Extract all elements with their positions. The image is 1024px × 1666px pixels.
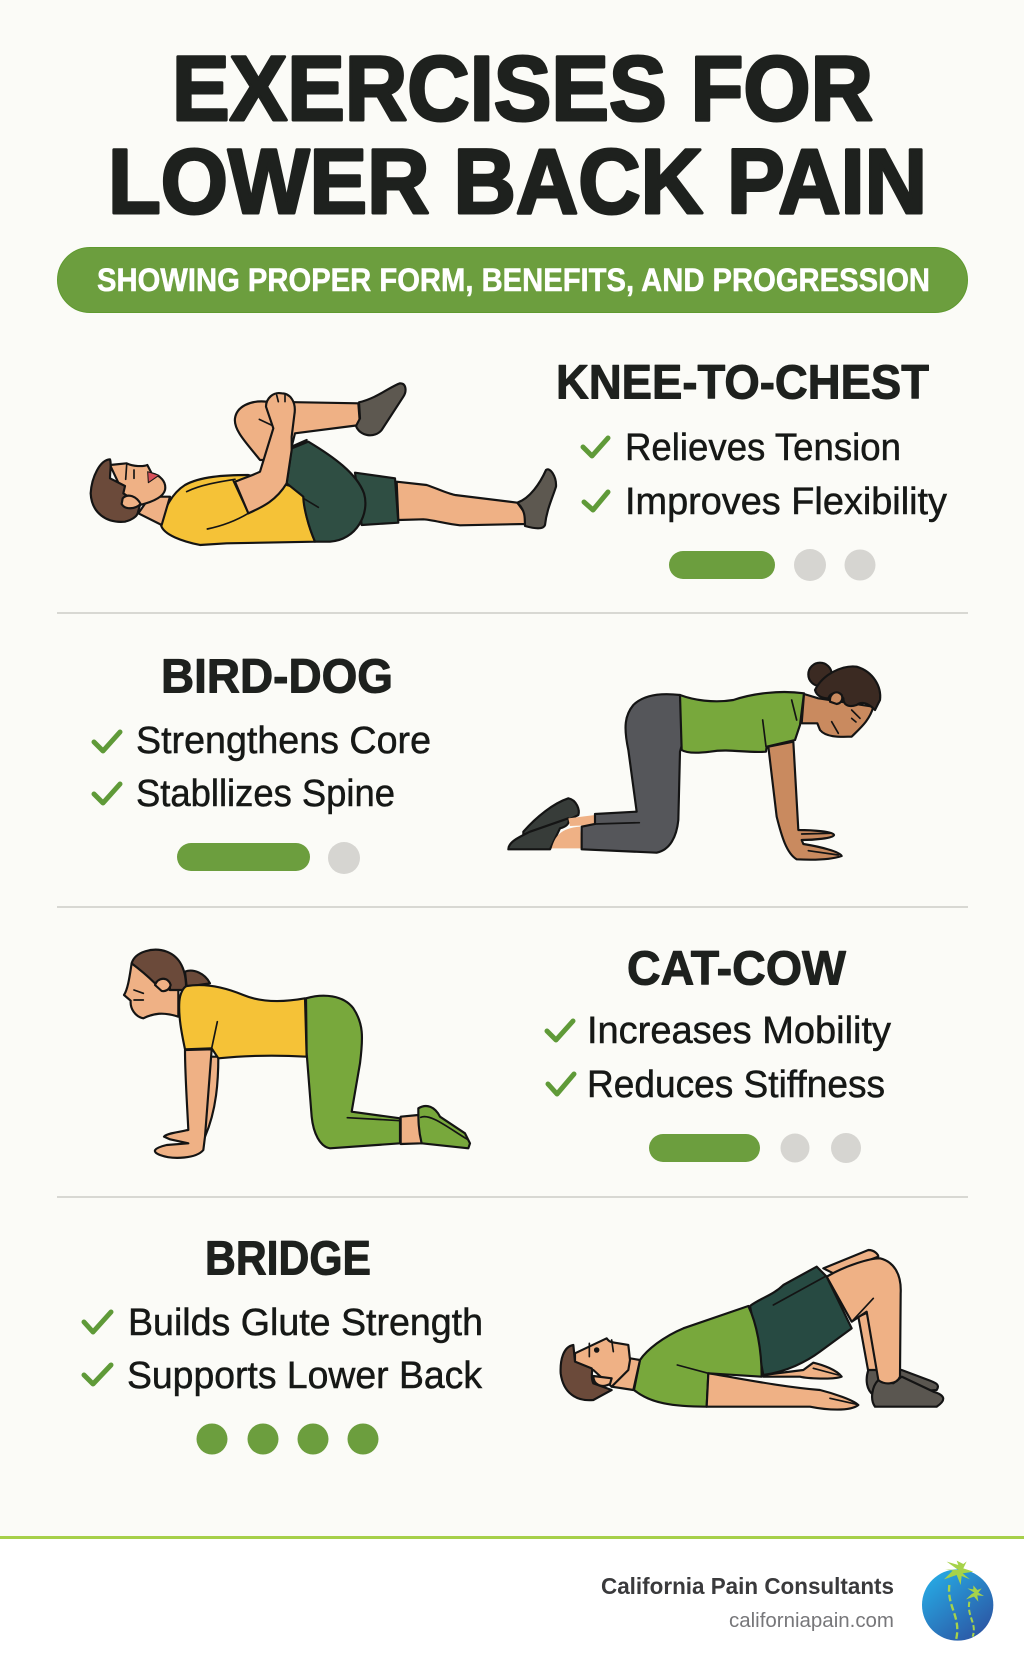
illustration: man doing bridge [561, 1250, 943, 1410]
panel: cat-cow [124, 942, 891, 1163]
benefit list: Increases Mobility [587, 1010, 891, 1052]
progression indicator [669, 549, 876, 581]
footer [0, 1536, 1024, 1666]
panel: knee-to-chest [91, 356, 947, 581]
heading: CAT-COW [627, 942, 847, 996]
benefit list: Builds Glute Strength [128, 1302, 483, 1344]
benefit list [583, 427, 947, 523]
panel: bird-dog [94, 650, 880, 874]
benefit list: Reduces Stiffness [587, 1064, 885, 1106]
benefit list: Improves Flexibility [625, 481, 947, 523]
logo: globe with palm trees [922, 1561, 993, 1641]
title [108, 38, 927, 233]
progression indicator [196, 1424, 378, 1454]
progression indicator [177, 842, 360, 874]
subtitle banner [58, 248, 968, 312]
title: LOWER BACK PAIN [108, 131, 927, 233]
benefit list: Supports Lower Back [127, 1355, 483, 1397]
benefit list [84, 1302, 483, 1397]
panel: bridge [84, 1232, 943, 1454]
title: EXERCISES FOR [172, 38, 873, 140]
subtitle banner: SHOWING PROPER FORM, BENEFITS, AND PROGRESSION [97, 262, 930, 298]
illustration: woman in bird-dog position [508, 663, 880, 860]
benefit list: Stabllizes Spine [136, 773, 395, 815]
benefit list [547, 1010, 891, 1106]
heading: KNEE-TO-CHEST [556, 356, 929, 410]
heading: BIRD-DOG [161, 650, 393, 704]
heading: BRIDGE [205, 1232, 371, 1286]
company name: California Pain Consultants [601, 1573, 894, 1599]
illustration: man doing knee-to-chest stretch [91, 383, 556, 545]
website: californiapain.com [729, 1610, 894, 1632]
benefit list: Strengthens Core [136, 720, 431, 762]
illustration: woman on hands and knees [124, 950, 470, 1158]
benefit list [94, 720, 431, 815]
benefit list: Relieves Tension [625, 427, 901, 469]
progression indicator [649, 1133, 861, 1163]
